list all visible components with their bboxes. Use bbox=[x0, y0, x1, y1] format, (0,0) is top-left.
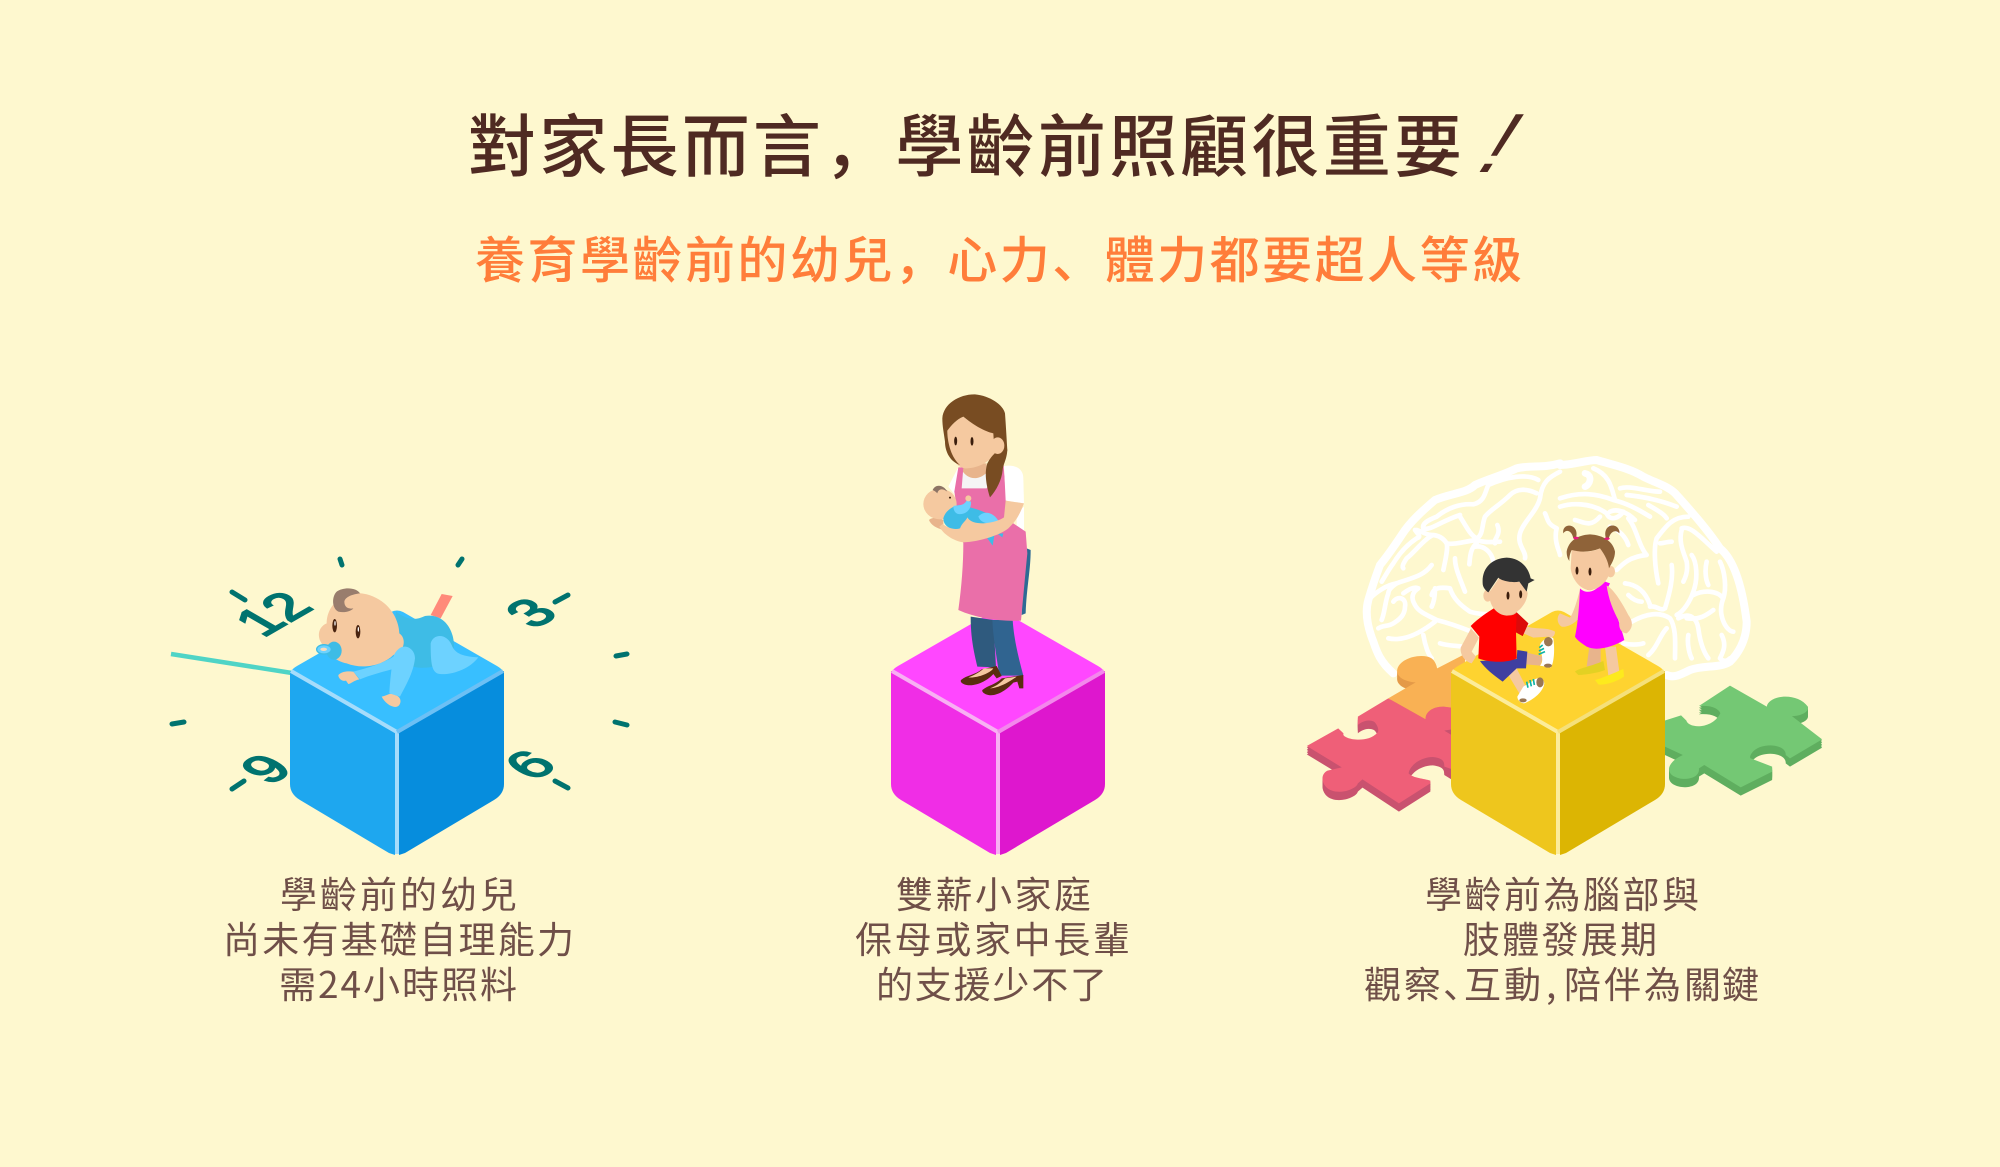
clock numbers: 6 bbox=[491, 742, 569, 788]
caption: mother: 的支援少不了 bbox=[876, 955, 1107, 1009]
caption: children: 學齡前為腦部與 bbox=[1425, 865, 1699, 919]
panel: mother on pink cube bbox=[891, 394, 1105, 855]
clock numbers bbox=[221, 584, 570, 792]
caption: mother: 保母或家中長輩 bbox=[855, 910, 1130, 964]
caption: children: 觀察、互動,陪伴為關鍵 bbox=[1364, 955, 1759, 1009]
caption: baby: 學齡前的幼兒 bbox=[280, 865, 517, 919]
caption: children bbox=[1364, 865, 1759, 1009]
clock numbers: 12 bbox=[221, 584, 325, 644]
blue cube bbox=[290, 610, 504, 855]
caption: baby: 需24小時照料 bbox=[279, 955, 517, 1009]
panel: children, brain and puzzle on yellow cube bbox=[1307, 460, 1822, 855]
clock numbers: 9 bbox=[227, 746, 305, 792]
yellow cube bbox=[1451, 610, 1665, 855]
title: ! bbox=[1461, 97, 1542, 190]
clock ticks bbox=[172, 559, 627, 789]
title: 對家長而言，學齡前照顧很重要 bbox=[468, 92, 1462, 191]
caption: children: 肢體發展期 bbox=[1463, 910, 1657, 964]
panel: baby on blue clock cube bbox=[171, 559, 627, 855]
subtitle: 養育學齡前的幼兒，心力、體力都要超人等級 bbox=[475, 221, 1522, 293]
caption: baby bbox=[223, 865, 574, 1009]
pink cube bbox=[891, 610, 1105, 855]
orange puzzle piece bbox=[1388, 654, 1465, 736]
brain outline bbox=[1367, 460, 1747, 676]
clock numbers: 3 bbox=[492, 590, 570, 636]
baby bbox=[317, 588, 478, 707]
boy bbox=[1461, 558, 1555, 703]
caption: baby: 尚未有基礎自理能力 bbox=[223, 910, 574, 964]
puzzle pieces bbox=[1307, 654, 1822, 812]
girl bbox=[1558, 525, 1632, 685]
clock minute hand bbox=[171, 654, 292, 673]
caption: mother bbox=[855, 865, 1130, 1009]
red puzzle piece bbox=[1307, 698, 1458, 812]
green puzzle piece bbox=[1661, 686, 1822, 796]
mother holding baby bbox=[923, 394, 1031, 695]
caption: mother: 雙薪小家庭 bbox=[896, 865, 1091, 919]
